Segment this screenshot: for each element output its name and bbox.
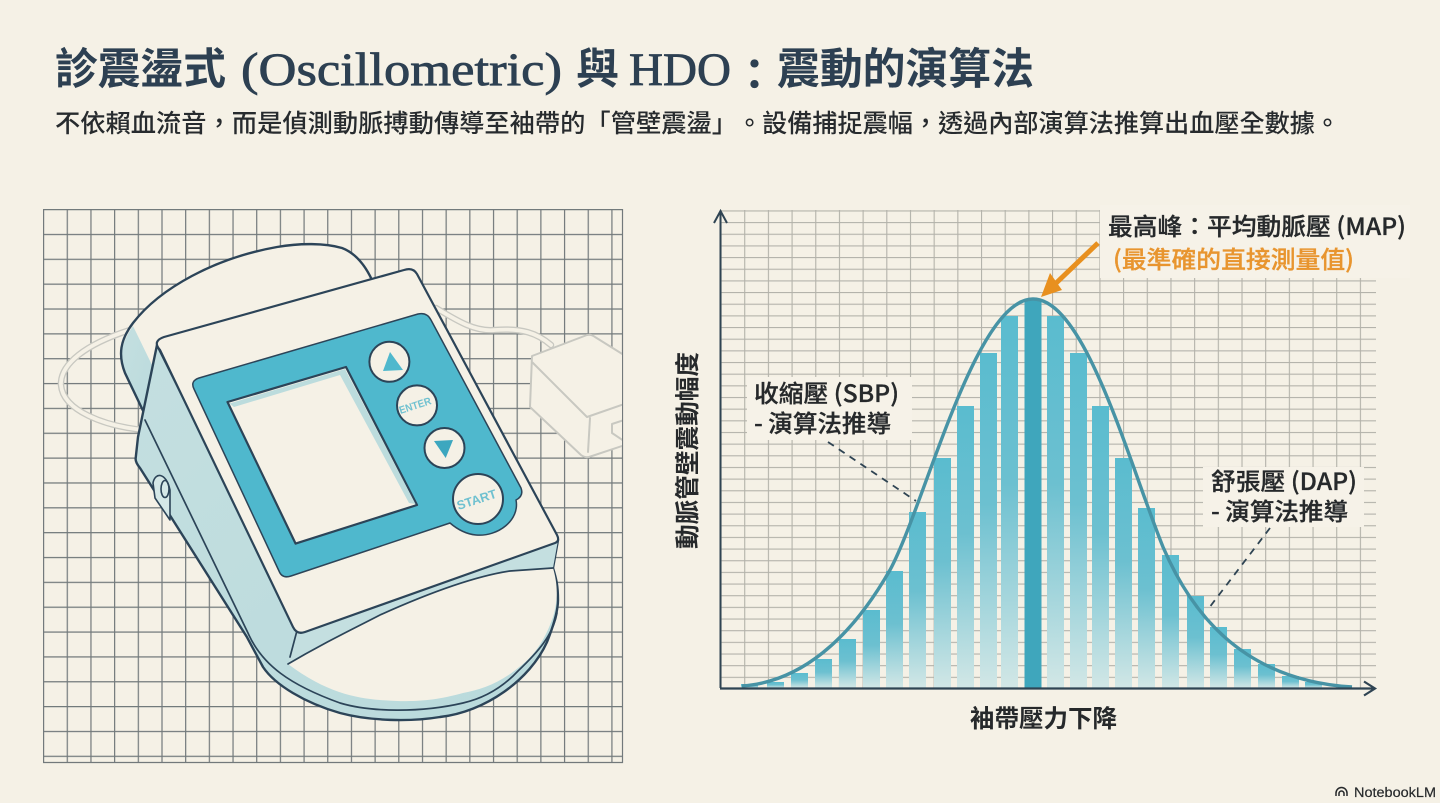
callout: DAP [1203,462,1364,527]
air tube [61,308,551,430]
air connector [529,334,622,458]
amplitude bars [741,316,1322,688]
cuff outline [121,244,372,440]
blood pressure monitor [61,244,640,720]
callout: DAP: 舒張壓 (DAP) [1211,462,1357,497]
panel: device illustration [43,209,640,762]
wedge outline [288,568,553,664]
teal control panel [193,314,522,577]
title: 診震盪式 [55,35,226,97]
device side and base [136,345,558,720]
subtitle [55,104,1340,140]
title [55,35,1034,103]
button: enter: ENTER [398,395,433,417]
leader: DAP [1210,528,1270,606]
callout: DAP: - 演算法推導 [1211,492,1348,527]
callout: MAP: (最準確的直接測量值) [1113,240,1354,275]
button: enter [397,385,437,425]
callout: SBP: - 演算法推導 [754,404,891,439]
x axis label: 袖帶壓力下降 [970,700,1117,735]
title: (Oscillometric) [241,44,562,96]
arrow: to peak [1041,243,1098,297]
cuff back [121,244,372,440]
panel: oscillometric chart [669,205,1410,735]
wedge [288,540,558,664]
title: HDO [629,44,731,96]
x axis [720,682,1375,696]
button: up [369,342,409,382]
title: 與 [576,35,619,97]
cuff shaded edge [122,326,157,440]
title: ： [733,41,776,103]
callout: MAP [1100,205,1410,278]
watermark: NotebookLM: NotebookLM [1354,785,1436,800]
callout: SBP: 收縮壓 (SBP) [754,374,899,409]
envelope curve [742,299,1352,687]
subtitle: 不依賴血流音，而是偵測動脈搏動傳導至袖帶的「管壁震盪」 [55,104,737,140]
y axis label: 動脈管壁震動幅度 [669,352,704,549]
screen [228,367,417,544]
base pad [288,568,557,701]
title: 震動的演算法 [777,35,1034,97]
peak bar [1024,300,1042,688]
icon: notebook arcs [1336,788,1347,796]
side port [153,475,170,520]
callout: MAP: 最高峰：平均動脈壓 (MAP) [1108,207,1406,242]
button: start [453,474,503,524]
button: start: START [455,487,499,513]
callout: SBP [747,374,912,440]
side ridge [145,420,557,710]
button: down [424,428,464,468]
subtitle: 。設備捕捉震幅，透過內部演算法推算出血壓全數據。 [737,104,1340,140]
front face [157,269,558,633]
y axis [714,211,727,688]
chart grid [720,210,1376,688]
grid background [43,209,622,762]
leader: SBP [828,442,916,501]
